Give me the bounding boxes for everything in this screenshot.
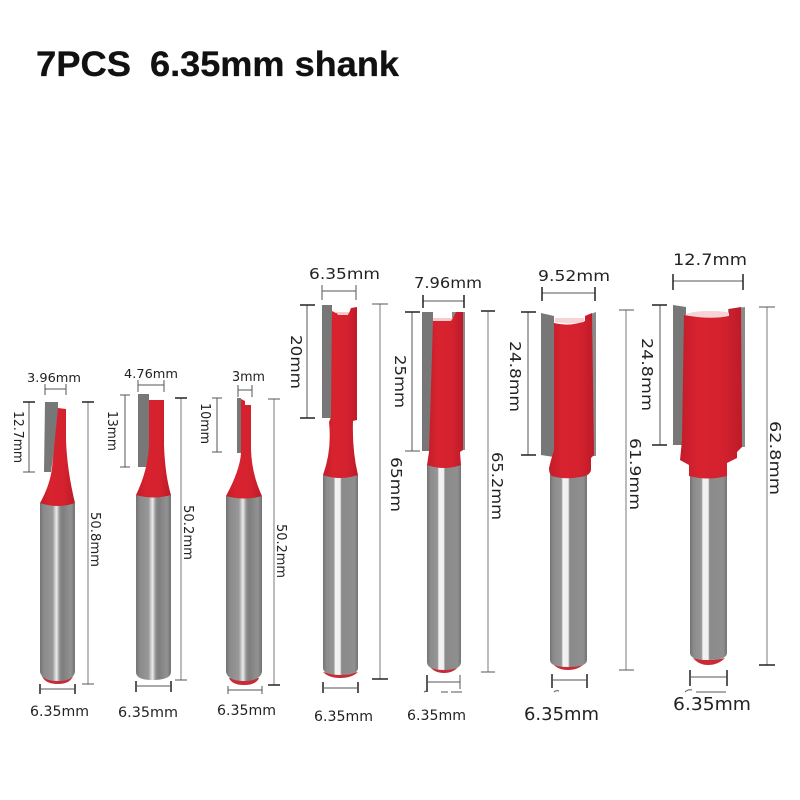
router bit 3: 3mm bbox=[197, 370, 288, 719]
router bit 6: 9.52mm: 24.8mm bbox=[506, 341, 524, 412]
router bit 2: 4.76mm: 6.35mm bbox=[118, 705, 178, 721]
router bit 4: 6.35mm bbox=[287, 265, 405, 725]
router bit 5: 7.96mm: 25mm bbox=[391, 355, 409, 408]
router bit 5: 7.96mm bbox=[391, 274, 506, 724]
router bit 3: 3mm: 50.2mm bbox=[273, 524, 288, 578]
router bit 6: 9.52mm bbox=[506, 267, 644, 725]
router bit 3: 3mm: 10mm bbox=[197, 403, 212, 444]
router bit 2: 4.76mm bbox=[104, 366, 195, 721]
router bit 7: 12.7mm: 12.7mm bbox=[673, 250, 747, 269]
router bit 7: 12.7mm bbox=[638, 250, 784, 715]
router bit 7: 12.7mm: 62.8mm bbox=[766, 421, 784, 495]
router bit 4: 6.35mm: 6.35mm bbox=[314, 709, 373, 725]
router bit 1: 3.96mm: 50.8mm bbox=[87, 512, 102, 567]
router bit 2: 4.76mm: 13mm bbox=[104, 411, 119, 451]
title: 7PCS bbox=[36, 45, 131, 84]
router bit 1: 3.96mm: 6.35mm bbox=[30, 704, 89, 720]
router bit 2: 4.76mm: 50.2mm bbox=[180, 505, 195, 560]
router bit 6: 9.52mm: 6.35mm bbox=[524, 704, 599, 725]
router bit 3: 3mm: 3mm bbox=[232, 370, 265, 385]
router bit 7: 12.7mm: 6.35mm bbox=[673, 694, 751, 715]
router bit 4: 6.35mm: 65mm bbox=[387, 457, 405, 512]
router bit 3: 3mm: 6.35mm bbox=[217, 703, 276, 719]
router bit 5: 7.96mm: 7.96mm bbox=[414, 274, 482, 292]
router bit 5: 7.96mm: 65.2mm bbox=[488, 452, 506, 520]
router bit 6: 9.52mm: 61.9mm bbox=[626, 438, 644, 510]
router bit 2: 4.76mm: 4.76mm bbox=[124, 366, 178, 381]
router bit 1: 3.96mm: 3.96mm bbox=[27, 370, 81, 385]
router bit 1: 3.96mm bbox=[10, 370, 102, 720]
router bit 4: 6.35mm: 6.35mm bbox=[309, 265, 380, 283]
router bit 6: 9.52mm: 9.52mm bbox=[538, 267, 610, 285]
title: 6.35mm shank bbox=[150, 45, 400, 84]
router bit 1: 3.96mm: 12.7mm bbox=[10, 411, 25, 463]
router bit 7: 12.7mm: 24.8mm bbox=[638, 338, 656, 411]
title bbox=[36, 45, 400, 84]
router bit 5: 7.96mm: 6.35mm bbox=[407, 708, 466, 724]
router bit 4: 6.35mm: 20mm bbox=[287, 335, 305, 389]
